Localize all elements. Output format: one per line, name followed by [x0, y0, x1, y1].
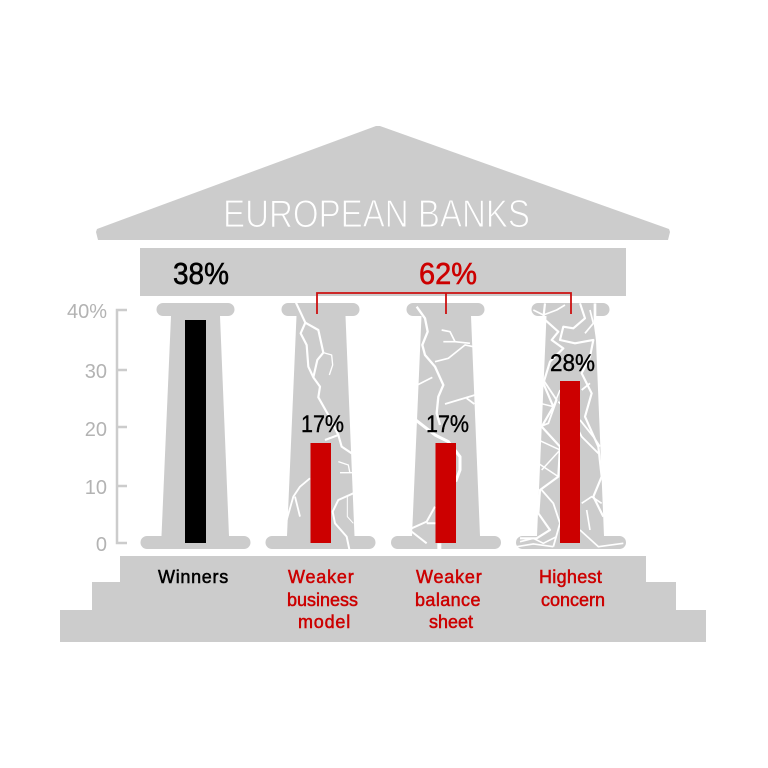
- label: highest concern: concern: [541, 590, 605, 610]
- label: weaker balance sheet: [415, 567, 482, 632]
- title: EUROPEAN BANKS: [223, 193, 530, 236]
- bar: highest concern: [560, 381, 580, 543]
- bracket connector: [317, 293, 571, 314]
- cracks: [517, 303, 623, 547]
- column: weaker balance sheet: [391, 303, 501, 551]
- label: weaker business model: Weaker: [288, 567, 354, 587]
- label: weaker balance sheet: balance: [415, 590, 481, 610]
- column: winners: [140, 303, 251, 549]
- at risk total: 62%: [419, 256, 477, 291]
- value label: weaker balance sheet: 17%: [426, 411, 469, 438]
- value label: highest concern: 28%: [550, 350, 595, 377]
- bar: winners: [185, 320, 206, 543]
- label: highest concern: Highest: [539, 567, 602, 587]
- label: weaker business model: business: [287, 590, 358, 610]
- winners total: 38%: [173, 256, 229, 291]
- label: weaker balance sheet: sheet: [429, 612, 473, 632]
- column: weaker business model: [266, 303, 376, 549]
- y axis: 30: [85, 361, 107, 383]
- y axis: 40%: [67, 301, 107, 323]
- column: highest concern: [516, 303, 626, 549]
- entablature: [140, 248, 626, 296]
- label: highest concern: [539, 567, 605, 610]
- stepped base: [60, 556, 706, 642]
- y axis: 10: [85, 477, 107, 499]
- label: weaker business model: model: [298, 612, 351, 632]
- label: winners: Winners: [158, 567, 229, 587]
- y axis: 20: [85, 419, 107, 441]
- cracks: [412, 307, 475, 551]
- y axis: 0: [96, 534, 107, 556]
- temple roof: [96, 126, 670, 240]
- bar: weaker business model: [310, 443, 331, 543]
- label: weaker balance sheet: Weaker: [416, 567, 482, 587]
- y axis: [67, 301, 127, 556]
- label: weaker business model: [287, 567, 358, 632]
- value label: weaker business model: 17%: [301, 411, 344, 438]
- bar: weaker balance sheet: [436, 443, 456, 543]
- cracks: [287, 303, 353, 549]
